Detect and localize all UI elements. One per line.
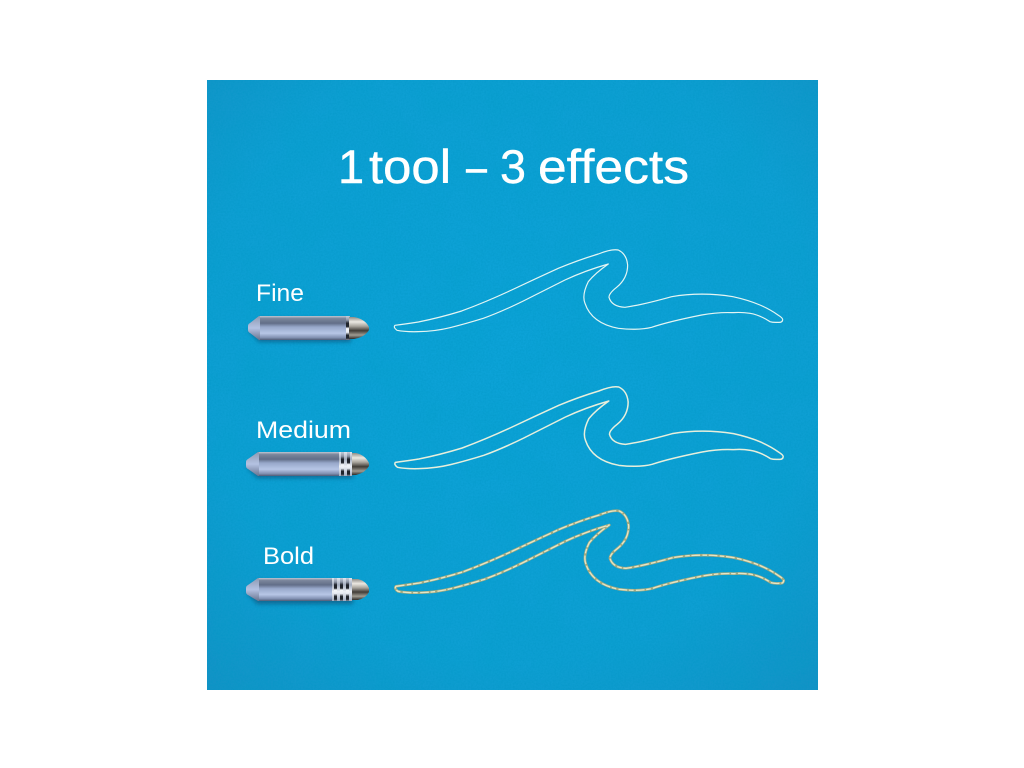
icon: medium tip pen <box>246 452 369 478</box>
wave: fine line <box>394 250 783 332</box>
icon: fine tip pen <box>248 316 369 342</box>
label: Fine: Fine <box>256 280 304 307</box>
label: Medium: Medium <box>256 417 351 444</box>
title: 3 <box>500 140 526 193</box>
wave: medium line <box>395 387 783 469</box>
title: effects <box>538 140 689 193</box>
title <box>338 140 689 193</box>
panel: blue textured background <box>207 80 818 690</box>
wave: bold line <box>395 511 784 593</box>
icon: bold tip pen <box>246 578 369 604</box>
title: – <box>466 140 488 193</box>
title: tool <box>369 140 451 193</box>
title: 1 <box>338 140 364 193</box>
label: Bold: Bold <box>263 543 314 570</box>
